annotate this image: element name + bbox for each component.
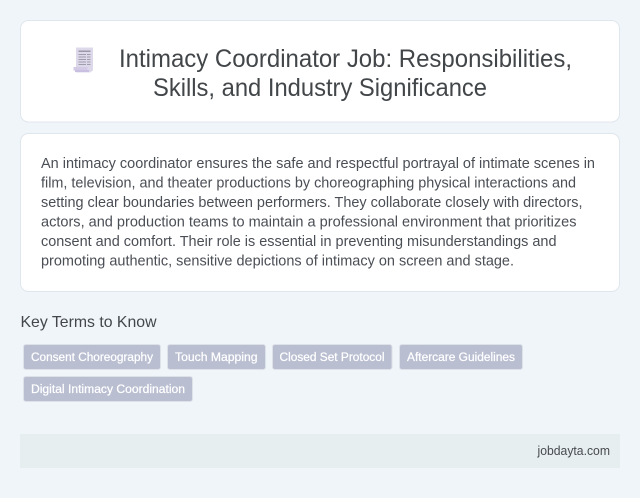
panel: description	[20, 134, 620, 292]
tag: Consent Choreography	[24, 344, 160, 370]
heading: Intimacy Coordinator Job: Responsibilities,	[119, 45, 572, 73]
panel: title card	[20, 20, 620, 122]
heading: key terms: Key Terms to Know	[20, 314, 157, 331]
text block: description: An intimacy coordinator ensures the safe and respectful portrayal of intimate scenes in	[41, 156, 595, 172]
icon: document scroll	[74, 48, 93, 72]
tag: Touch Mapping: Touch Mapping	[175, 350, 258, 364]
text block: description: film, television, and theater productions by choreographing physical interactions and	[41, 176, 576, 192]
text block: description	[41, 156, 595, 270]
tag: Aftercare Guidelines	[400, 344, 522, 370]
footer bar	[20, 434, 620, 468]
tag: Closed Set Protocol	[272, 344, 392, 370]
text block: description: promoting authentic, sensitive depictions of intimacy on screen and stage.	[41, 254, 514, 270]
tag: Digital Intimacy Coordination: Digital Intimacy Coordination	[31, 382, 185, 396]
text block: description: consent and comfort. Their role is essential in preventing misunderstandings and	[41, 234, 556, 250]
footer source text: jobdayta.com	[537, 444, 610, 458]
tag: Consent Choreography: Consent Choreography	[31, 350, 154, 364]
heading: Skills, and Industry Significance	[153, 74, 487, 102]
tag list	[24, 344, 522, 402]
text block: description: actors, and production teams to maintain a professional environment that prioritizes	[41, 214, 576, 230]
tag: Aftercare Guidelines: Aftercare Guidelines	[407, 350, 515, 364]
tag: Closed Set Protocol: Closed Set Protocol	[280, 350, 384, 364]
tag: Digital Intimacy Coordination	[24, 376, 192, 402]
text block: description: setting clear boundaries between performers. They collaborate closely with directors,	[41, 195, 582, 211]
tag: Touch Mapping	[168, 344, 266, 370]
heading	[119, 45, 572, 102]
